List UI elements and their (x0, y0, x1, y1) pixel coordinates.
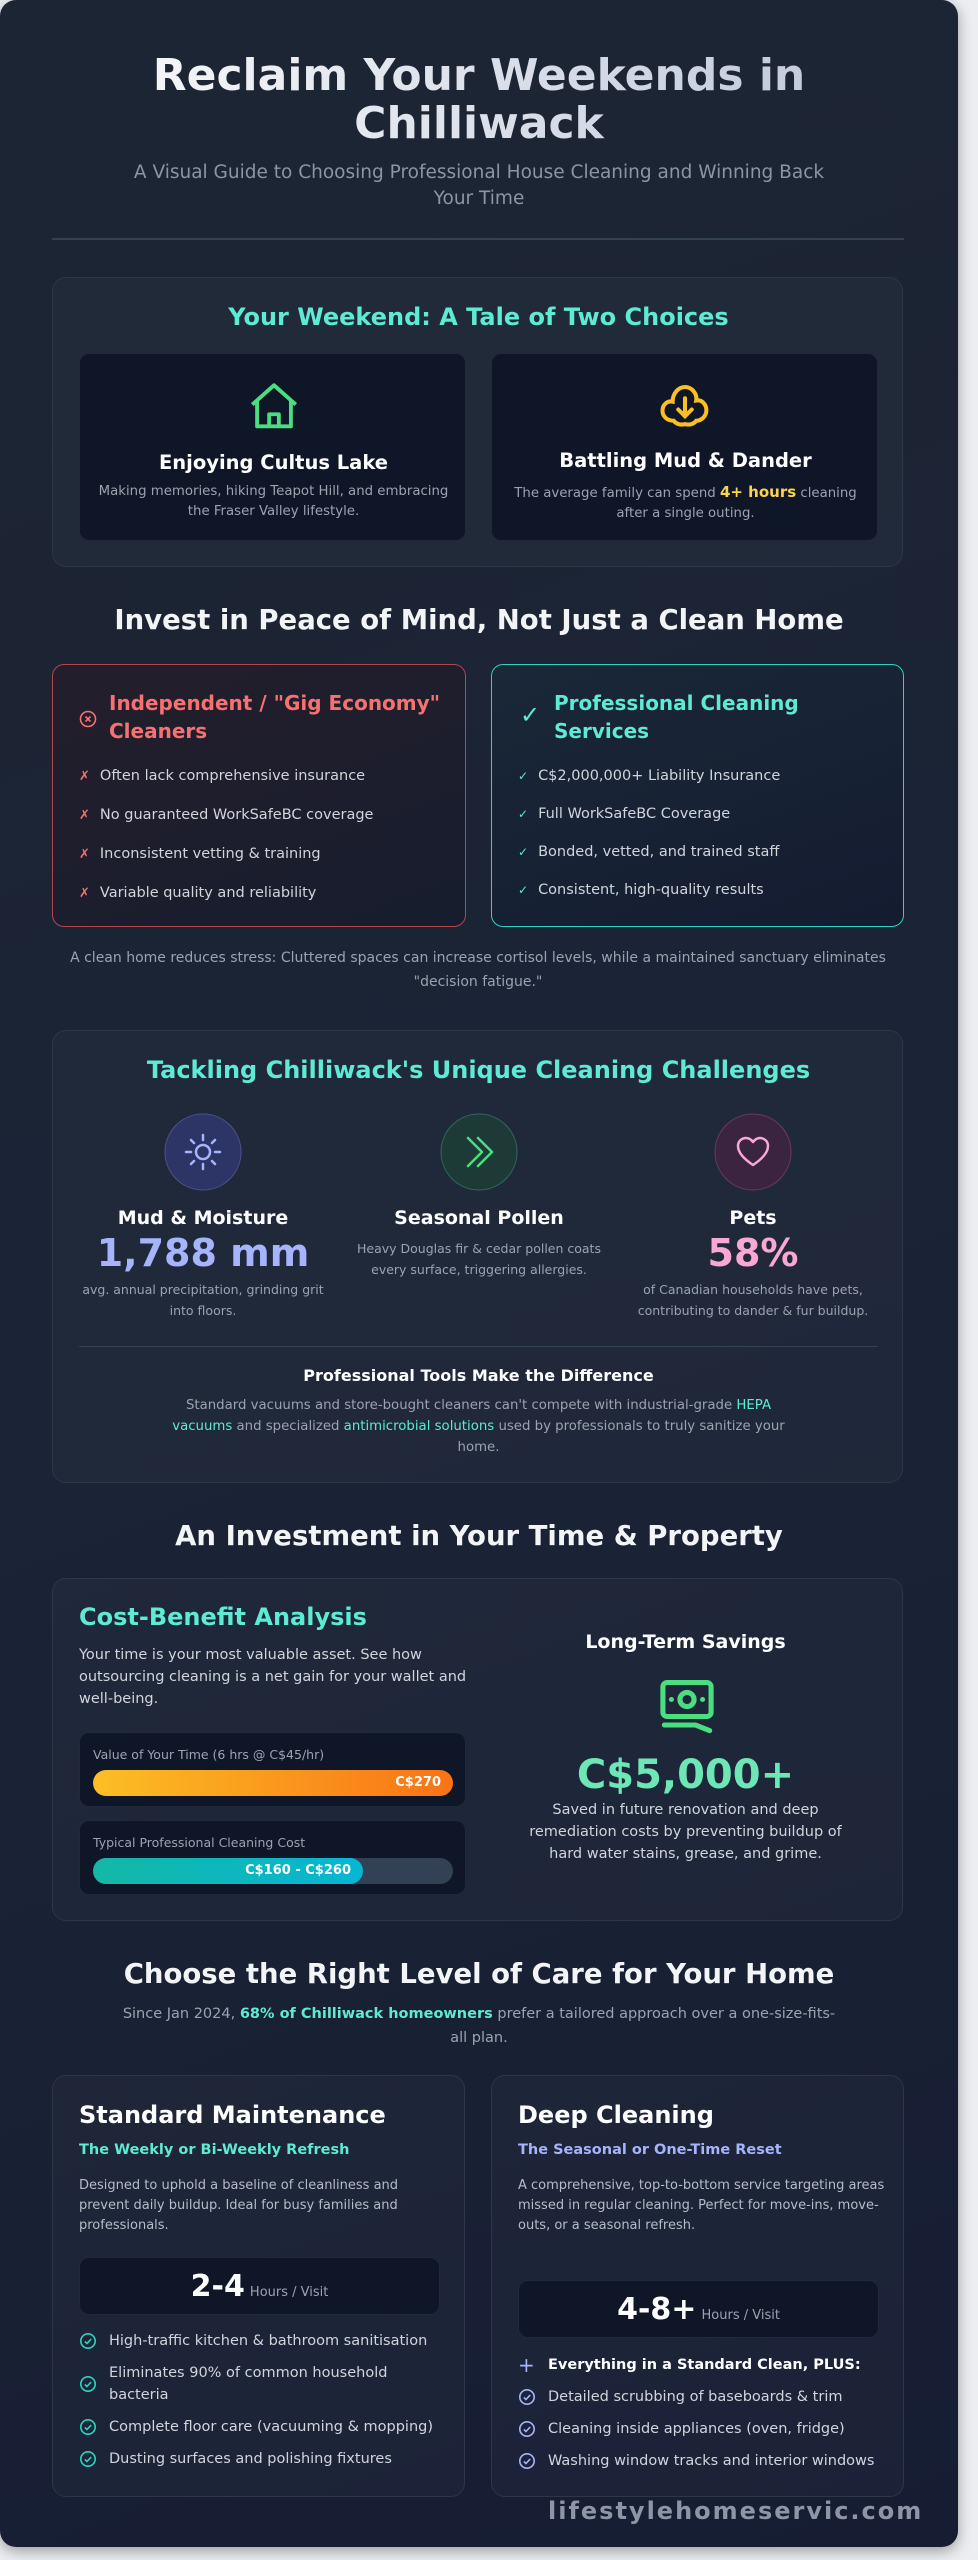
card: cultus lake (79, 353, 466, 541)
panel: standard: Designed to uphold a baseline of cleanliness and prevent daily buildup. Ideal for busy families and professionals. (79, 2178, 398, 2233)
heading: investment: An Investment in Your Time & Property (175, 1520, 783, 1552)
bar: cleaning cost: C$160 - C$260 (245, 1863, 351, 1878)
panel: standard (52, 2075, 465, 2497)
icon: house (251, 383, 297, 428)
list: ✓ Consistent, high-quality results (518, 882, 764, 898)
long-term savings: Long-Term Savings (585, 1631, 786, 1653)
card title: Battling Mud & Dander (559, 449, 812, 472)
panel: standard: The Weekly or Bi-Weekly Refresh (79, 2142, 349, 2158)
feature list (80, 2333, 433, 2467)
box heading: Professional Cleaning Services (554, 691, 799, 743)
icon: sun (164, 1114, 242, 1190)
box heading: Independent / "Gig Economy" Cleaners (109, 691, 440, 743)
panel: deep cleaning: Deep Cleaning (518, 2101, 714, 2129)
list: ✗ Variable quality and reliability (79, 885, 316, 901)
heading: Cost-Benefit Analysis (79, 1603, 367, 1631)
feature list: Detailed scrubbing of baseboards & trim (548, 2389, 842, 2405)
item: pets (638, 1114, 868, 1318)
bar: cleaning cost (79, 1820, 466, 1895)
hours box: 2-4 Hours / Visit (191, 2269, 328, 2304)
watermark: lifestylehomeservic.com (548, 2497, 923, 2525)
stat: 58% (708, 1231, 798, 1275)
long-term savings (529, 1631, 842, 1862)
panel: standard: Standard Maintenance (79, 2101, 386, 2129)
item: mud (82, 1114, 324, 1318)
bar: cleaning cost: Typical Professional Cleaning Cost (93, 1835, 305, 1850)
icon: heart (714, 1114, 792, 1190)
feature list: Cleaning inside appliances (oven, fridge) (548, 2421, 845, 2437)
list: ✓ C$2,000,000+ Liability Insurance (518, 768, 780, 784)
list: ✓ Bonded, vetted, and trained staff (518, 844, 779, 860)
heading: peace of mind: Invest in Peace of Mind, Not Just a Clean Home (114, 604, 844, 636)
feature list: High-traffic kitchen & bathroom sanitisation (109, 2333, 427, 2349)
icon: money (660, 1680, 714, 1734)
title: Mud & Moisture (118, 1207, 288, 1229)
text: Your time is your most valuable asset. See how outsourcing cleaning is a net gain for your wallet and well-being. (79, 1647, 466, 1707)
hours box (79, 2257, 440, 2315)
title (0, 52, 958, 148)
desc: avg. annual precipitation, grinding grit into floors. (82, 1282, 324, 1318)
item: pollen (357, 1114, 601, 1277)
list: ✓ Full WorkSafeBC Coverage (518, 806, 730, 822)
feature list: Eliminates 90% of common household bacteria (109, 2365, 387, 2403)
desc: of Canadian households have pets, contributing to dander & fur buildup. (638, 1282, 868, 1318)
panel heading: Your Weekend: A Tale of Two Choices (228, 303, 729, 331)
bar: time value (79, 1732, 466, 1807)
feature list: Complete floor care (vacuuming & mopping) (109, 2419, 433, 2435)
icon: cloud (660, 385, 708, 427)
panel: cost benefit (52, 1578, 903, 1921)
list (518, 768, 780, 898)
card title: Enjoying Cultus Lake (159, 451, 388, 474)
list: ✗ Often lack comprehensive insurance (79, 768, 365, 784)
title: Pets (729, 1207, 777, 1229)
stat: C$5,000+ (577, 1752, 794, 1798)
list (79, 768, 373, 901)
feature list: Dusting surfaces and polishing fixtures (109, 2451, 392, 2467)
note: A clean home reduces stress: Cluttered spaces can increase cortisol levels, while a maintained sanctuary eliminates "decision fatigue." (70, 950, 886, 990)
subtitle: A Visual Guide to Choosing Professional House Cleaning and Winning Back Your Time (134, 162, 824, 209)
stat: 1,788 mm (97, 1231, 309, 1275)
bar: time value: Value of Your Time (6 hrs @ C$45/hr) (93, 1747, 324, 1762)
tools text: Standard vacuums and store-bought cleaners can't compete with industrial-grade HEPA vacuums and specialized antimicrobial solutions used by professionals to truly sanitize your home. (172, 1398, 785, 1455)
box: gig cleaners (52, 664, 466, 927)
tools heading: Professional Tools Make the Difference (303, 1366, 654, 1385)
card: mud & dander (491, 353, 878, 541)
panel: challenges (52, 1030, 903, 1483)
desc: Heavy Douglas fir & cedar pollen coats every surface, triggering allergies. (357, 1241, 601, 1277)
heading: level of care: Choose the Right Level of Care for Your Home (124, 1958, 834, 1990)
title: Seasonal Pollen (394, 1207, 564, 1229)
desc: Saved in future renovation and deep remediation costs by preventing buildup of hard water stains, grease, and grime. (529, 1802, 842, 1862)
title: Reclaim Your Weekends in (153, 50, 805, 101)
subtext: Since Jan 2024, 68% of Chilliwack homeowners prefer a tailored approach over a one-size-fits-all plan. (123, 2006, 835, 2046)
feature list (518, 2353, 874, 2469)
list: ✗ No guaranteed WorkSafeBC coverage (79, 807, 373, 823)
icon: check: ✓ (520, 701, 540, 729)
bar: time value: C$270 (395, 1775, 441, 1790)
panel: deep cleaning: The Seasonal or One-Time Reset (518, 2142, 782, 2158)
hours box (518, 2280, 879, 2338)
title: Chilliwack (354, 98, 604, 149)
hours box: 4-8+ Hours / Visit (617, 2292, 780, 2327)
panel heading: Tackling Chilliwack's Unique Cleaning Challenges (147, 1056, 810, 1084)
card text: The average family can spend 4+ hours cleaning after a single outing. (514, 483, 857, 521)
feature list: Everything in a Standard Clean, PLUS: (548, 2357, 861, 2373)
icon: x circle (80, 710, 96, 728)
icon: chevrons (440, 1114, 518, 1190)
list: ✗ Inconsistent vetting & training (79, 846, 321, 862)
box: professional (491, 664, 904, 927)
feature list: + (518, 2353, 535, 2377)
panel: deep cleaning: A comprehensive, top-to-bottom service targeting areas missed in regular cleaning. Perfect for move-ins, move-outs, or a seasonal refresh. (518, 2178, 884, 2233)
panel: tale of two choices (52, 277, 903, 567)
card text: Making memories, hiking Teapot Hill, and embracing the Fraser Valley lifestyle. (99, 484, 448, 519)
feature list: Washing window tracks and interior windows (548, 2453, 874, 2469)
panel: deep cleaning (491, 2075, 904, 2497)
